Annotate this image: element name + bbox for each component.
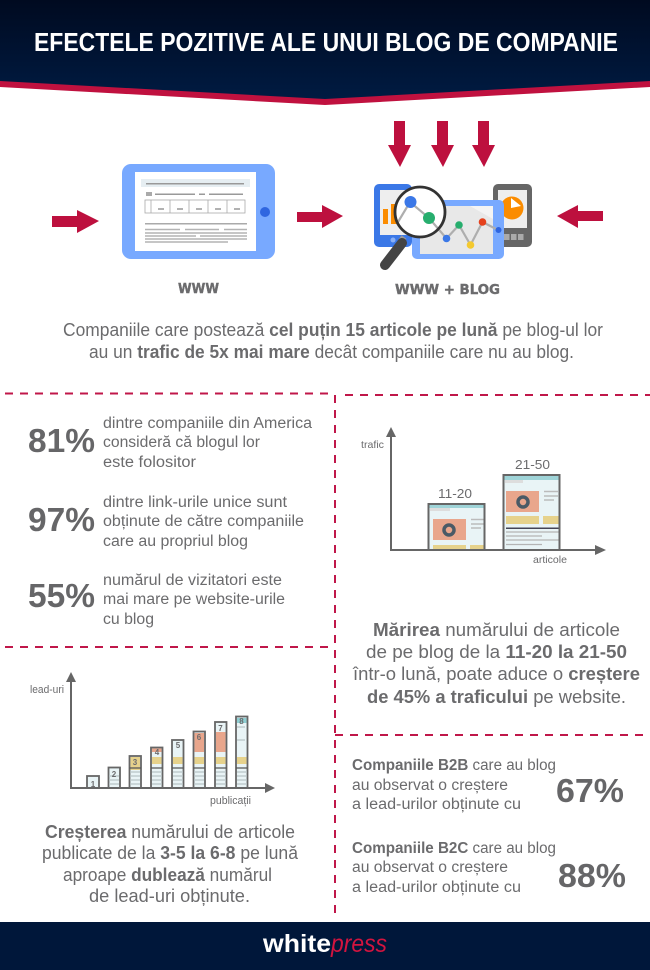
- bars 1 to 8: 4: [155, 748, 160, 757]
- stat 97%: 97%: [28, 501, 95, 538]
- text: more articles double leads: aproape dublează numărul: [63, 865, 272, 885]
- stat: B2B 67%: [352, 757, 624, 813]
- label: www: WWW: [178, 282, 219, 297]
- bar: 11-20: [428, 486, 485, 550]
- header banner: [0, 0, 650, 105]
- axis label: publicații: publicații: [210, 795, 251, 807]
- text: more articles more traffic: de pe blog de la 11-20 la 21-50: [366, 642, 627, 662]
- stat 81%: dintre companiile din America: [103, 415, 312, 432]
- stat 97%: [28, 494, 304, 550]
- bar: 21-50: 21-50: [515, 457, 550, 472]
- stat: B2C 88%: a lead-urilor obținute cu: [352, 879, 521, 896]
- bars 1 to 8: 5: [176, 741, 181, 750]
- stat 97%: care au propriul blog: [103, 533, 248, 550]
- stat: B2C 88%: 88%: [558, 857, 626, 894]
- stat 55%: 55%: [28, 577, 95, 614]
- label: www + blog: WWW + BLOG: [395, 283, 500, 298]
- axis label: articole: articole: [533, 554, 567, 566]
- bar: 21-50: [503, 457, 560, 550]
- text: more articles double leads: [42, 822, 299, 906]
- stat 81%: este folositor: [103, 454, 196, 471]
- intro text: au un trafic de 5x mai mare decât companiile care nu au blog.: [89, 342, 574, 362]
- stat: B2B 67%: Companiile B2B care au blog: [352, 757, 556, 774]
- text: more articles double leads: de lead-uri obținute.: [89, 886, 250, 906]
- intro text: Companiile care postează cel puțin 15 articole pe lună pe blog-ul lor: [63, 320, 603, 340]
- logo: whitepress: press: [330, 930, 387, 958]
- chart: traffic by articles: [361, 427, 606, 566]
- bar: 11-20: 11-20: [438, 486, 472, 501]
- bars 1 to 8: 3: [133, 758, 138, 767]
- stat 81%: consideră că blogul lor: [103, 434, 260, 451]
- icon: devices with magnifier: [374, 184, 532, 265]
- stat 81%: [28, 415, 312, 471]
- stat 97%: obținute de către companiile: [103, 513, 304, 530]
- stat 55%: cu blog: [103, 611, 154, 628]
- stat 81%: 81%: [28, 422, 95, 459]
- bars 1 to 8: 7: [218, 724, 223, 733]
- arrow: into www from left: [52, 210, 99, 233]
- stat: B2B 67%: au observat o creștere: [352, 777, 508, 794]
- axes: [66, 672, 275, 793]
- text: more articles more traffic: într-o lună, poate aduce o creștere: [352, 664, 640, 684]
- footer: [0, 922, 650, 970]
- bars 1 to 8: [87, 716, 248, 789]
- panel: statistics: [28, 415, 312, 628]
- bars 1 to 8: 6: [197, 733, 202, 742]
- intro text: [63, 320, 603, 362]
- bars 1 to 8: 8: [239, 717, 244, 726]
- stat: B2B 67%: a lead-urilor obținute cu: [352, 796, 521, 813]
- axis label: trafic: trafic: [361, 439, 384, 451]
- stat: B2C 88%: Companiile B2C care au blog: [352, 840, 556, 857]
- text: more articles double leads: publicate de la 3-5 la 6-8 pe lună: [42, 843, 299, 863]
- stat 55%: mai mare pe website-urile: [103, 591, 285, 608]
- bars 1 to 8: 1: [91, 780, 96, 789]
- chart: leads by publications: [30, 672, 275, 807]
- text: more articles double leads: Creșterea numărului de articole: [45, 822, 295, 842]
- axes: [386, 427, 606, 555]
- icon: www tablet: [122, 164, 275, 259]
- stat 55%: [28, 572, 285, 628]
- arrow: from the right: [557, 205, 603, 228]
- arrow: between www and blog: [297, 205, 343, 228]
- axis label: lead-uri: lead-uri: [30, 684, 64, 696]
- bars 1 to 8: 2: [112, 770, 117, 779]
- logo: whitepress: [262, 930, 387, 958]
- stat: B2C 88%: [352, 840, 626, 896]
- arrows: three pointing down: [388, 121, 495, 167]
- stat: B2B 67%: 67%: [556, 772, 624, 809]
- stat 55%: numărul de vizitatori este: [103, 572, 282, 589]
- text: more articles more traffic: de 45% a traficului pe website.: [367, 687, 626, 707]
- text: more articles more traffic: [352, 620, 640, 707]
- text: more articles more traffic: Mărirea numărului de articole: [373, 620, 620, 640]
- logo: whitepress: white: [262, 930, 331, 958]
- stat: B2C 88%: au observat o creștere: [352, 859, 508, 876]
- stat 97%: dintre link-urile unice sunt: [103, 494, 288, 511]
